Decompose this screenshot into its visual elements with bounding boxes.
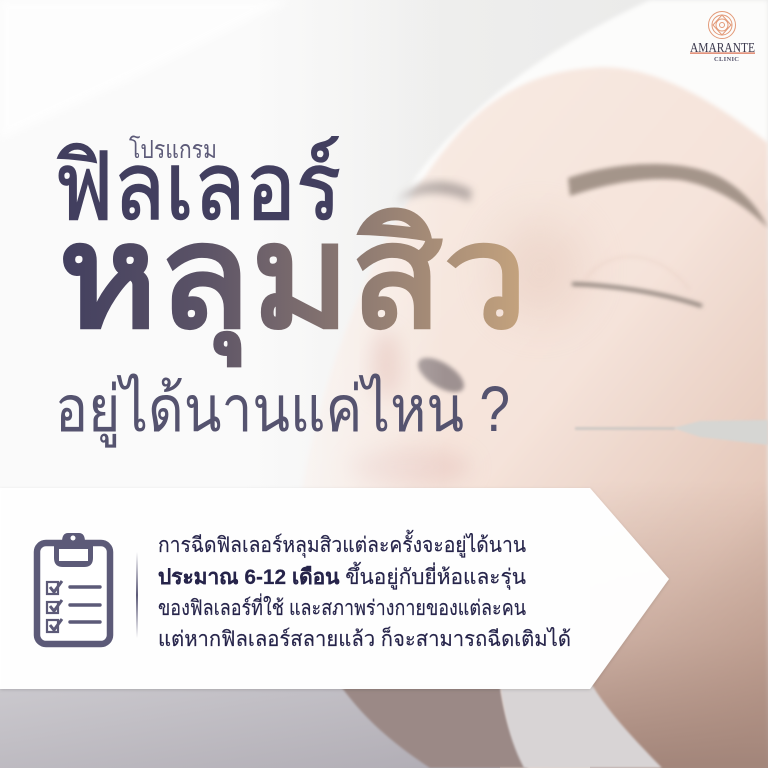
white arrow panel (0, 488, 669, 689)
title: filler: ฟิลเลอร์ (54, 134, 341, 239)
title: acne scars: หลุมสิว (58, 195, 528, 368)
body text: การฉีดฟิลเลอร์หลุมสิวแต่ละครั้งจะอยู่ได้นาน (158, 530, 526, 558)
body text: ประมาณ 6-12 เดือน ขึ้นอยู่กับยี่ห้อและรุ่น (158, 562, 526, 590)
diagonal shape top left (0, 0, 290, 140)
icon: clipboard checklist (37, 533, 110, 644)
body text: แต่หากฟิลเลอร์สลายแล้ว ก็จะสามารถฉีดเติมได้ (158, 625, 571, 651)
logo: Amarante Clinic: CLINIC (714, 56, 739, 63)
nose and cheek shading (496, 220, 584, 320)
body text: ของฟิลเลอร์ที่ใช้ และสภาพร่างกายของแต่ละคน (158, 593, 526, 620)
divider (136, 552, 138, 638)
bottom photo strip (0, 685, 662, 768)
syringe (575, 420, 768, 445)
face skin (300, 67, 768, 768)
eyebrow left (398, 181, 472, 202)
logo mandala (708, 12, 736, 38)
logo: Amarante Clinic: AMARANTE (690, 40, 755, 55)
subtitle question: อยู่ได้นานแค่ไหน ? (55, 373, 510, 448)
closed eye (572, 284, 702, 306)
left fade over photo (0, 0, 768, 490)
eyebrow right (568, 164, 768, 228)
nostril (413, 351, 469, 399)
towel (400, 0, 768, 220)
body text (158, 530, 571, 651)
title: program: โปรแกรม (129, 135, 217, 164)
lips (348, 447, 472, 487)
logo: Amarante Clinic (690, 12, 755, 63)
